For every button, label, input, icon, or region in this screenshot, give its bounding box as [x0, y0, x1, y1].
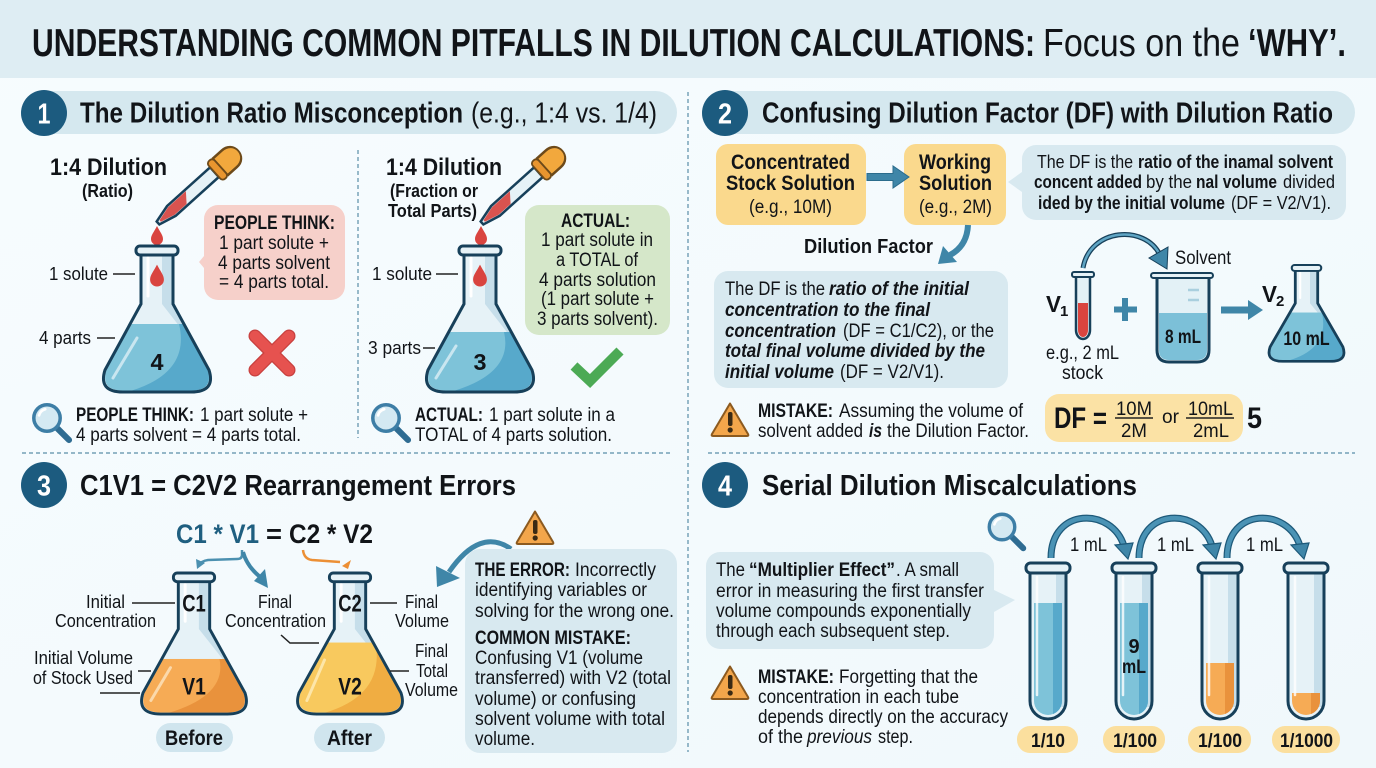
mistake note: Assuming the volume of — [839, 401, 1024, 422]
label: V1: 1 — [1060, 303, 1068, 320]
flask: C2 V2: V2 — [338, 674, 362, 701]
flask: C1 V1: V1 — [182, 674, 206, 701]
transfer labels: 1 mL — [1070, 535, 1107, 556]
panel: 2 dilution factor vs ratio — [702, 90, 1355, 442]
box: working solution — [904, 144, 1006, 225]
label: solvent: Solvent — [1175, 248, 1232, 269]
panel: the error: Confusing V1 (volume — [475, 648, 643, 669]
flask: C2 V2: C2 — [338, 591, 362, 618]
transfer arrows — [1051, 518, 1309, 559]
mistake note: previous — [806, 727, 872, 748]
tube 4 — [1284, 563, 1328, 723]
right heading: 1:4 dilution fraction: Total Parts) — [388, 201, 477, 221]
flask: C1 V1 — [135, 573, 253, 717]
labels: after flask — [225, 591, 458, 700]
callout: DF ratio definition: ratio of the inamal solvent — [1138, 152, 1333, 172]
callout: people think: PEOPLE THINK: — [214, 213, 335, 234]
formula: C1V1 = C2V2: C2 * V2 — [289, 519, 373, 549]
label: dilution factor: Dilution Factor — [804, 235, 933, 258]
left heading: 1:4 dilution ratio — [50, 154, 167, 201]
panel: the error: solving for the wrong one. — [475, 601, 674, 622]
badges: dilution levels — [1017, 726, 1340, 753]
diagram: V1 plus solvent equals V2 — [1046, 234, 1348, 384]
beaker: 8 mL — [1151, 273, 1213, 362]
formula: dilution factor: 10M — [1116, 399, 1152, 420]
heading 4: Serial Dilution Miscalculations — [762, 470, 1137, 502]
tube 2 — [1112, 563, 1156, 723]
box: concentrated stock solution — [716, 144, 866, 225]
arrow: beaker to flask — [1221, 300, 1263, 320]
formula: dilution factor: 10mL — [1188, 399, 1233, 420]
mistake note: Forgetting that the — [839, 667, 978, 688]
heading 2 — [702, 90, 1355, 136]
callout: people think: 1 part solute + — [219, 233, 329, 254]
heading 3 — [21, 462, 516, 508]
badges: dilution levels: 1/100 — [1198, 731, 1242, 752]
heading 2: 2 — [718, 98, 732, 130]
right heading: 1:4 dilution fraction: 1:4 Dilution — [386, 154, 502, 181]
callout: actual: 1 part solute in — [541, 230, 653, 251]
flask: 3 parts — [420, 246, 540, 394]
callout: people think: = 4 parts total. — [219, 272, 329, 293]
labels: after flask: Total — [416, 660, 448, 681]
panel: the error: COMMON MISTAKE: — [475, 628, 631, 649]
label: stock: e.g., 2 mL — [1046, 343, 1119, 364]
formula: C1V1 = C2V2: = — [266, 519, 282, 549]
panel: DF definition: total final volume divided by the — [725, 341, 985, 362]
badges: dilution levels: 1/100 — [1113, 731, 1157, 752]
formula: dilution factor: 2mL — [1193, 421, 1229, 442]
panel: the error: solvent volume with total — [475, 709, 665, 730]
labels: before flask: Initial Volume — [34, 647, 133, 668]
panel: DF definition: (DF = V2/V1). — [840, 362, 944, 383]
callout: multiplier effect: through each subsequent step. — [716, 621, 950, 642]
flask: 10 mL: 10 mL — [1283, 328, 1330, 350]
test tube: stock — [1072, 272, 1094, 339]
flask labels left: 4 parts — [39, 327, 91, 348]
callout: multiplier effect: . A small — [896, 560, 959, 581]
tube 2: 9 — [1128, 636, 1140, 658]
label: after: After — [327, 727, 372, 750]
callout: DF ratio definition: nal volume — [1196, 172, 1277, 192]
transfer labels: 1 mL — [1157, 535, 1194, 556]
flask labels right: 1 solute — [372, 263, 432, 284]
labels: before flask: Initial — [86, 591, 125, 612]
labels: after flask: Final — [258, 591, 292, 612]
icon: dropper — [474, 142, 570, 232]
panel: the error — [465, 549, 677, 753]
label: V2: 2 — [1276, 293, 1284, 310]
heading 3: 3 — [37, 470, 51, 502]
formula: C1V1 = C2V2: C1 * V1 — [176, 519, 259, 549]
callout: DF ratio definition: ided by the initial volume — [1038, 193, 1225, 213]
icon: red cross — [255, 336, 289, 370]
label: V2: V — [1262, 281, 1278, 307]
callout: DF ratio definition: concent added — [1034, 172, 1142, 192]
box: concentrated stock solution: Stock Solution — [726, 171, 855, 195]
arrow: stock to working — [867, 166, 909, 188]
callout: actual — [525, 205, 670, 335]
flask: 4 parts — [97, 246, 217, 394]
label: V2 — [1262, 281, 1284, 310]
labels: before flask: of Stock Used — [33, 667, 133, 688]
callout: people think: 4 parts solvent — [218, 253, 331, 274]
panel: DF definition: concentration — [725, 321, 836, 342]
callout: multiplier effect: volume compounds exponentially — [716, 601, 971, 622]
mistake note: step. — [878, 727, 913, 748]
flask: C2 V2 — [291, 573, 409, 717]
callout: DF ratio definition: The DF is the — [1037, 152, 1133, 172]
formula: dilution factor: or — [1162, 407, 1180, 428]
panel: DF definition: The DF is the — [725, 279, 825, 300]
callout: actual: ACTUAL: — [561, 211, 630, 232]
result: 5: 5 — [1247, 402, 1262, 435]
panel: DF definition — [714, 271, 1008, 388]
mistake note: MISTAKE: — [758, 401, 833, 422]
callout: multiplier effect — [706, 552, 1015, 649]
mistake note: is — [869, 421, 882, 442]
labels: after flask: Volume — [395, 610, 449, 631]
badges: dilution levels: 1/10 — [1031, 731, 1065, 752]
arrow: error to final volume — [436, 542, 511, 587]
panel: the error: THE ERROR: — [475, 560, 570, 581]
title band: ‘WHY’. — [1248, 22, 1346, 65]
mistake note: concentration in each tube — [758, 687, 959, 708]
mistake note: of the — [758, 727, 803, 748]
labels: after flask: Volume — [405, 679, 458, 700]
labels: after flask: Concentration — [225, 610, 326, 631]
panel: DF definition: ratio of the initial — [829, 279, 970, 300]
icon: dropper — [150, 142, 246, 232]
arrow: stock to beaker — [1083, 234, 1168, 269]
box: concentrated stock solution: Concentrated — [731, 150, 850, 174]
formula: dilution factor: 2M — [1121, 421, 1147, 442]
flask: 3 parts: 3 — [473, 349, 487, 375]
note: people think: 4 parts solvent = 4 parts total. — [76, 425, 301, 446]
tube 3 — [1198, 563, 1242, 723]
left heading: 1:4 dilution ratio: (Ratio) — [82, 181, 133, 201]
icon: falling drop — [475, 226, 487, 245]
box: working solution: Solution — [919, 171, 992, 195]
panel: the error: Incorrectly — [575, 560, 656, 581]
formula: dilution factor — [1045, 394, 1243, 442]
mistake note — [712, 401, 1029, 442]
box: concentrated stock solution: (e.g., 10M) — [749, 197, 832, 218]
mistake note: depends directly on the accuracy — [758, 707, 1008, 728]
labels: before flask — [33, 591, 175, 693]
tube 1 — [1026, 563, 1070, 723]
icon: magnifier — [989, 514, 1023, 548]
labels: after flask: Final — [405, 591, 438, 612]
transfer labels: 1 mL — [1246, 535, 1283, 556]
icon: falling drop — [151, 226, 163, 245]
panel: 3 rearrangement errors — [21, 462, 677, 753]
panel: 1 dilution ratio misconception — [21, 90, 677, 446]
mistake note: solvent added — [758, 421, 863, 442]
badges: dilution levels: 1/1000 — [1280, 731, 1333, 752]
flask: 4 parts: 4 — [150, 349, 164, 375]
title band — [0, 0, 1376, 78]
panel: DF definition: concentration to the final — [725, 300, 931, 321]
left heading: 1:4 dilution ratio: 1:4 Dilution — [50, 154, 167, 181]
flask labels left: 1 solute — [49, 263, 108, 284]
note: actual: ACTUAL: — [415, 405, 483, 426]
label: stock — [1046, 343, 1119, 384]
formula: dilution factor: DF = — [1054, 402, 1107, 435]
mistake note — [712, 666, 1008, 748]
box: working solution: Working — [919, 150, 991, 174]
callout: actual: 3 parts solvent). — [537, 309, 658, 330]
callout: DF ratio definition: divided — [1283, 172, 1335, 192]
tube 2: mL — [1122, 657, 1146, 678]
callout: actual: 4 parts solution — [539, 270, 656, 291]
heading 1 — [21, 90, 677, 136]
labels: after flask: Final — [415, 640, 448, 661]
panel: the error: identifying variables or — [475, 580, 648, 601]
label: after — [314, 723, 385, 752]
arrows from formula — [196, 550, 351, 588]
note: people think — [34, 405, 308, 446]
heading 4: 4 — [718, 470, 732, 502]
flask: 10 mL — [1264, 265, 1348, 363]
right heading: 1:4 dilution fraction: (Fraction or — [390, 181, 478, 201]
label: V1: V — [1046, 291, 1062, 317]
callout: actual: (1 part solute + — [541, 289, 654, 310]
callout: multiplier effect: “Multiplier Effect” — [749, 560, 895, 581]
heading 1: 1 — [38, 98, 50, 130]
note: actual: TOTAL of 4 parts solution. — [415, 425, 612, 446]
callout: people think — [199, 205, 345, 300]
box: working solution: (e.g., 2M) — [919, 197, 992, 218]
label: stock: stock — [1062, 363, 1103, 384]
label: V1 — [1046, 291, 1068, 320]
formula: C1V1 = C2V2 — [176, 519, 373, 549]
label: before — [156, 723, 233, 752]
callout: multiplier effect: The — [716, 560, 745, 581]
panel: the error: transferred) with V2 (total — [475, 668, 671, 689]
note: people think: PEOPLE THINK: — [76, 405, 194, 426]
panel: the error: volume. — [475, 729, 535, 750]
heading 3: C1V1 = C2V2 Rearrangement Errors — [80, 470, 516, 502]
callout: DF ratio definition — [1008, 145, 1346, 220]
mistake note: the Dilution Factor. — [887, 421, 1029, 442]
beaker: 8 mL: 8 mL — [1165, 326, 1201, 348]
title band: Focus on the — [1043, 22, 1240, 65]
panel: 4 serial dilution — [702, 462, 1340, 753]
heading 1: The Dilution Ratio Misconception — [80, 98, 463, 130]
heading 4 — [702, 462, 1137, 508]
right heading: 1:4 dilution fraction — [386, 154, 502, 221]
heading 1: (e.g., 1:4 vs. 1/4) — [471, 98, 657, 130]
arrow: working to dilution factor — [938, 225, 968, 264]
callout: multiplier effect: error in measuring the first transfer — [716, 581, 985, 602]
title band: UNDERSTANDING COMMON PITFALLS IN DILUTION CALCULATIONS: — [32, 22, 1035, 65]
labels: before flask: Concentration — [55, 610, 156, 631]
flask labels right — [368, 263, 458, 358]
note: actual: 1 part solute in a — [489, 405, 615, 426]
note: actual — [373, 405, 615, 446]
callout: actual: a TOTAL of — [556, 250, 639, 271]
label: before: Before — [165, 727, 223, 750]
icon: plus — [1114, 298, 1137, 321]
panel: the error: volume) or confusing — [475, 689, 636, 710]
flask labels right: 3 parts — [368, 337, 421, 358]
flask labels left — [39, 263, 135, 348]
icon: warning — [517, 512, 553, 544]
note: people think: 1 part solute + — [200, 405, 308, 426]
mistake note: MISTAKE: — [758, 667, 834, 688]
panel: DF definition: (DF = C1/C2), or the — [843, 321, 994, 342]
callout: DF ratio definition: by the — [1146, 172, 1192, 192]
icon: green check — [574, 351, 620, 381]
callout: DF ratio definition: (DF = V2/V1). — [1231, 193, 1331, 213]
panel: DF definition: initial volume — [725, 362, 834, 383]
transfer labels — [1070, 535, 1283, 556]
flask: C1 V1: C1 — [182, 591, 206, 618]
